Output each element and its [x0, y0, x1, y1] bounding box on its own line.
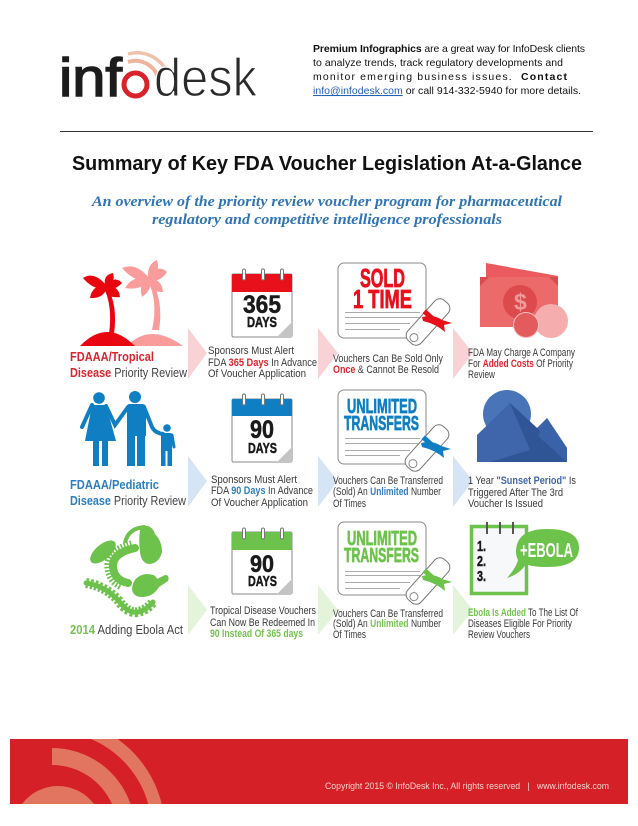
icon: certificate unlimited transfers blue: UNLIMITED [347, 396, 417, 418]
icon: calendar 90 days blue: 90 [250, 416, 274, 444]
text: sponsors must alert 365 [208, 345, 317, 380]
label: 2014 adding Ebola act: 2014 Adding Ebola Act [70, 622, 183, 637]
icon: calendar 365 days [232, 269, 292, 337]
intro text block: to analyze trends, track regulatory developments and [313, 57, 563, 69]
icon: calendar 90 days blue [232, 394, 292, 462]
text: Ebola is added: Ebola Is Added To The List Of [468, 607, 579, 619]
intro text block [313, 43, 585, 97]
icon: certificate unlimited transfers green [338, 522, 453, 608]
subtitle [91, 194, 562, 228]
icon: calendar 365 days: DAYS [247, 314, 277, 331]
text: added costs: FDA May Charge A Company [468, 347, 575, 359]
label: FDAAA pediatric: Disease Priority Review [70, 493, 187, 508]
icon: checklist with +Ebola bubble [472, 522, 579, 594]
icon: certificate sold 1 time: SOLD [360, 263, 405, 293]
text: unlimited transfers green: Of Times [333, 629, 366, 641]
intro text block: monitor emerging business issues. Contact [313, 71, 568, 83]
text: sponsors must alert 90 [211, 474, 313, 509]
text: tropical disease vouchers [210, 605, 316, 640]
icon: family [82, 391, 174, 466]
label: FDAAA tropical: Disease Priority Review [70, 365, 188, 380]
icon: calendar 90 days blue: DAYS [248, 440, 277, 457]
text: sunset period: Voucher Is Issued [468, 498, 543, 510]
subtitle: An overview of the priority review voucher program for pharmaceutical [91, 194, 562, 210]
label: FDAAA pediatric [70, 477, 187, 508]
text: sponsors must alert 365: Sponsors Must Alert [208, 345, 294, 357]
logo: infodesk [59, 48, 258, 108]
text: tropical disease vouchers: Can Now Be Redeemed In [210, 617, 315, 629]
icon: palm islands [80, 260, 183, 346]
text: added costs: For Added Costs Of Priority [468, 358, 573, 370]
text: tropical disease vouchers: Tropical Disease Vouchers [210, 605, 316, 617]
text: tropical disease vouchers: 90 Instead Of 365 days [210, 628, 303, 640]
text: sponsors must alert 90: Sponsors Must Alert [211, 474, 297, 486]
icon: mountains and sun [477, 390, 567, 462]
title: Summary of Key FDA Voucher Legislation At-a-Glance [72, 152, 582, 175]
subtitle: regulatory and competitive intelligence professionals [152, 212, 502, 228]
label: FDAAA pediatric: FDAAA/Pediatric [70, 477, 159, 492]
footer band [10, 739, 628, 804]
text: unlimited transfers blue: Vouchers Can Be Transferred [333, 475, 443, 487]
text: unlimited transfers blue: (Sold) An Unlimited Number [333, 486, 441, 498]
icon: checklist with +Ebola bubble: 1. [477, 538, 486, 555]
intro text block: Premium Infographics are a great way for InfoDesk clients [313, 43, 585, 55]
icon: calendar 90 days green [232, 528, 292, 594]
row 2: FDAAA pediatric disease [70, 390, 576, 510]
icon: certificate unlimited transfers green: TRANSFERS [344, 545, 419, 567]
text: added costs: Review [468, 369, 495, 381]
text: sunset period: 1 Year "Sunset Period" Is [468, 475, 576, 487]
text: sold only once: Once & Cannot Be Resold [333, 364, 439, 376]
text: Ebola is added: Diseases Eligible For Priority [468, 618, 572, 630]
icon: money and coins: $ [514, 289, 527, 315]
icon: calendar 365 days: 365 [243, 291, 281, 319]
label: FDAAA tropical: FDAAA/Tropical [70, 349, 154, 364]
icon: certificate sold 1 time: 1 TIME [353, 284, 412, 314]
text: sponsors must alert 365: Of Voucher Application [208, 368, 306, 380]
row 1: FDAAA tropical disease [70, 260, 575, 381]
arrows: row 2 [188, 456, 473, 507]
arrows: row 3 [188, 585, 473, 635]
icon: checklist with +Ebola bubble: 2. [477, 553, 486, 570]
row 3: 2014 adding Ebola act [70, 522, 579, 641]
icon: certificate sold 1 time [338, 263, 453, 349]
text: sponsors must alert 90: FDA 90 Days In Advance [211, 485, 313, 497]
text: sunset period: Triggered After The 3rd [468, 487, 563, 499]
icon: certificate unlimited transfers green: UNLIMITED [347, 528, 417, 550]
icon: calendar 90 days green: 90 [250, 551, 274, 578]
logo: infodesk: desk [154, 48, 258, 108]
icon: checklist with +Ebola bubble: 3. [477, 568, 486, 585]
icon: checklist with +Ebola bubble: +EBOLA [520, 540, 573, 562]
text: unlimited transfers blue [333, 475, 443, 510]
text: sunset period [468, 475, 576, 510]
copyright text: Copyright 2015 © InfoDesk Inc., All rights reserved | www.infodesk.com [325, 781, 609, 792]
text: added costs [468, 347, 575, 381]
intro text block: info@infodesk.com or call 914-332-5940 for more details. [313, 85, 581, 97]
label: FDAAA tropical [70, 349, 188, 380]
text: unlimited transfers green: (Sold) An Unlimited Number [333, 618, 441, 630]
text: Ebola is added: Review Vouchers [468, 629, 530, 641]
text: sponsors must alert 365: FDA 365 Days In Advance [208, 357, 317, 369]
text: Ebola is added [468, 607, 579, 641]
text: unlimited transfers green: Vouchers Can Be Transferred [333, 608, 443, 620]
text: unlimited transfers green [333, 608, 443, 641]
icon: certificate unlimited transfers blue: TRANSFERS [344, 413, 419, 435]
footer signal arcs [22, 739, 162, 804]
icon: calendar 90 days green: DAYS [248, 573, 277, 590]
logo: infodesk: inf [59, 48, 123, 108]
icon: microbes [86, 526, 169, 612]
arrows: row 1 [188, 328, 473, 379]
icon: certificate unlimited transfers blue [338, 390, 452, 475]
text: sold only once [333, 353, 443, 376]
text: sponsors must alert 90: Of Voucher Application [211, 497, 308, 509]
text: sold only once: Vouchers Can Be Sold Only [333, 353, 443, 365]
text: unlimited transfers blue: Of Times [333, 498, 366, 510]
icon: money and coins [480, 263, 568, 338]
